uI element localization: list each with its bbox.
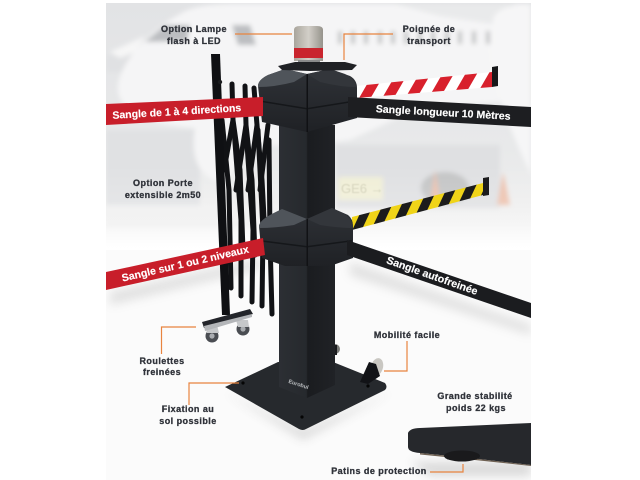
lower strap head xyxy=(259,208,353,266)
callout: Poignée de transport: transport xyxy=(407,36,451,46)
strap: Sangle autofreinée xyxy=(347,240,531,318)
soft shadows below labels and product xyxy=(110,258,531,476)
strap: red and white striped xyxy=(356,66,498,98)
callout: Roulettes freinées: Roulettes xyxy=(139,356,185,366)
label: Option Porte extensible 2m50: extensible 2m50 xyxy=(125,190,201,200)
strap: Sangle longueur 10 Mètres xyxy=(348,97,531,127)
inset: base detail with protection pad xyxy=(408,423,531,466)
LED flash lamp xyxy=(294,26,323,66)
gate wheels xyxy=(202,309,253,342)
callout: Roulettes freinées: freinées xyxy=(143,367,181,377)
callout: Patins de protection xyxy=(331,464,463,476)
label: Grande stabilité poids 22 kgs xyxy=(437,391,513,413)
strap: yellow and black striped xyxy=(352,177,489,230)
callout: Fixation au sol possible: Fixation au xyxy=(162,404,214,414)
strap: Sangle autofreinée: Sangle autofreinée xyxy=(385,254,479,298)
callout: Fixation au sol possible: sol possible xyxy=(159,416,217,426)
post column: Eurobul xyxy=(287,379,310,391)
strap: Sangle de 1 à 4 directions xyxy=(106,97,263,125)
rear caster xyxy=(330,344,340,355)
callout: Fixation au sol possible xyxy=(159,383,239,426)
transport caster xyxy=(360,357,385,384)
callout: Option Lampe flash à LED: Option Lampe xyxy=(161,24,227,34)
label: Grande stabilité poids 22 kgs: Grande stabilité xyxy=(437,391,513,401)
label: Option Porte extensible 2m50: Option Porte xyxy=(133,178,193,188)
upper strap head with carry handle xyxy=(258,62,357,132)
strap: Sangle sur 1 ou 2 niveaux xyxy=(106,238,265,290)
background: blurred airplane on the tarmac xyxy=(106,3,531,228)
base plate xyxy=(225,362,386,430)
strap: Sangle sur 1 ou 2 niveaux: Sangle sur 1 ou 2 niveaux xyxy=(121,244,250,285)
strap: Sangle de 1 à 4 directions: Sangle de 1 à 4 directions xyxy=(112,102,242,122)
post column xyxy=(279,125,335,398)
strap: Sangle longueur 10 Mètres: Sangle longueur 10 Mètres xyxy=(375,103,511,123)
callout: Poignée de transport xyxy=(344,24,455,60)
label: Grande stabilité poids 22 kgs: poids 22 kgs xyxy=(446,403,506,413)
label: Option Porte extensible 2m50 xyxy=(125,178,201,200)
callout: Mobilité facile: Mobilité facile xyxy=(374,330,440,340)
callout: Mobilité facile xyxy=(374,330,440,371)
callout: Roulettes freinées xyxy=(139,327,196,377)
callout: Option Lampe flash à LED: flash à LED xyxy=(167,36,221,46)
callout: Option Lampe flash à LED xyxy=(161,24,292,46)
infographic xyxy=(106,3,531,480)
background: blurred airplane on the tarmac: GE6 → xyxy=(341,181,384,196)
callout: Poignée de transport: Poignée de xyxy=(403,24,455,34)
callout: Patins de protection: Patins de protection xyxy=(331,466,427,476)
extensible scissor gate xyxy=(211,54,272,315)
